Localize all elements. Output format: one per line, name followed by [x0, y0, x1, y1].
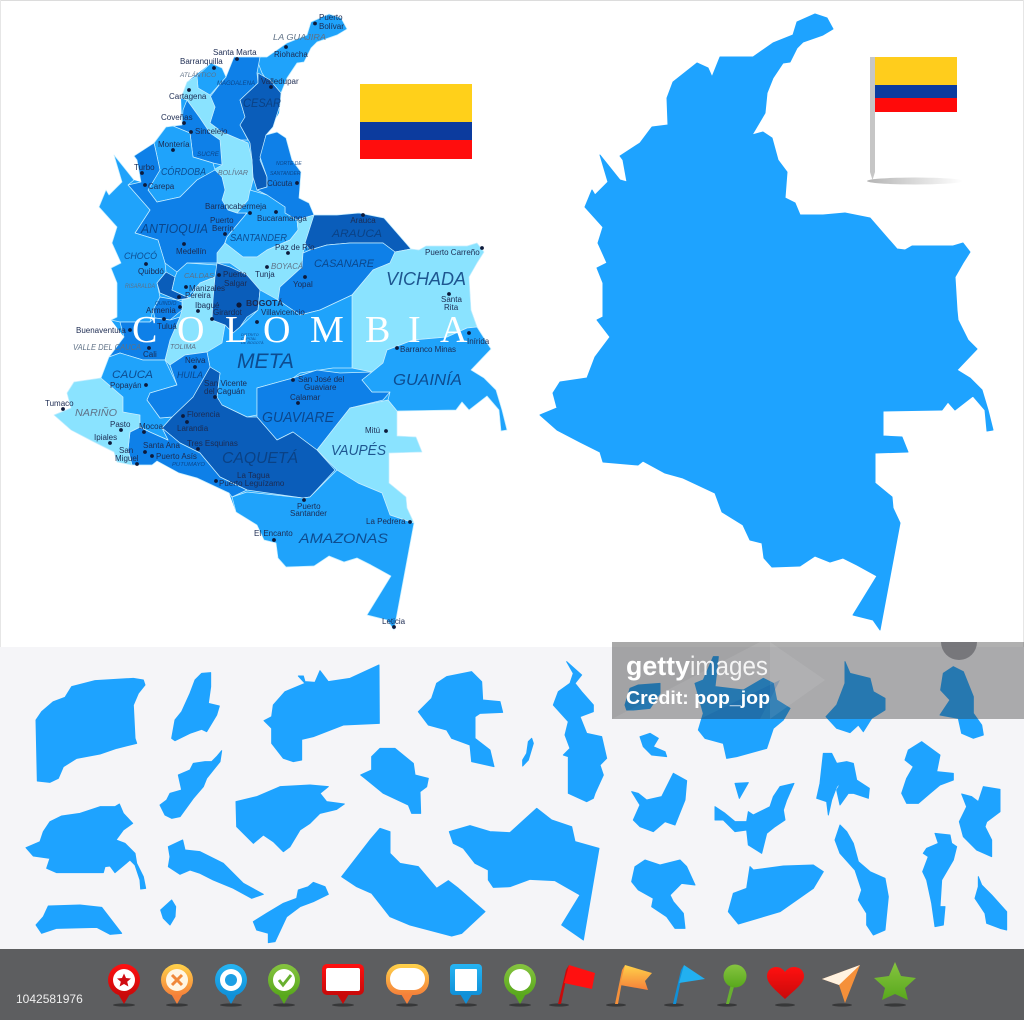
department labels: META — [237, 350, 294, 373]
city labels: del Caguán — [204, 387, 245, 396]
city labels: Manizales — [189, 284, 225, 293]
city labels: Bolívar — [319, 22, 344, 31]
city labels: Salgar — [224, 279, 247, 288]
department labels: DE BOGOTÁ — [241, 341, 264, 345]
city labels: Girardot — [213, 308, 243, 317]
watermark banner: Credit: pop_jop — [626, 688, 770, 708]
department labels: HUILA — [177, 370, 203, 380]
city labels: San Vicente — [204, 379, 248, 388]
department labels: ANTIOQUIA — [140, 221, 208, 236]
department labels: CHOCÓ — [124, 251, 157, 261]
city labels: Bucaramanga — [257, 214, 307, 223]
city labels: Valledupar — [261, 77, 299, 86]
city labels: Barranquilla — [180, 57, 223, 66]
city labels: Miguel — [115, 454, 139, 463]
icon: red speech bubble — [322, 964, 364, 1004]
icon: orange speech bubble — [386, 964, 429, 1004]
panel: plain silhouette map of Colombia — [540, 14, 993, 630]
icon: green round pin — [724, 964, 746, 1004]
city labels — [45, 13, 490, 626]
city labels: Ipiales — [94, 433, 117, 442]
city labels: Popayán — [110, 381, 142, 390]
city labels: Puerto Asís — [156, 452, 197, 461]
department labels: BOLÍVAR — [218, 168, 249, 177]
city labels: Puerto Leguízamo — [219, 479, 285, 488]
icon shadows — [113, 1003, 906, 1007]
city labels: Armenia — [146, 306, 176, 315]
shapes: middle column — [342, 662, 607, 940]
city labels: Florencia — [187, 410, 220, 419]
department labels: VAUPÉS — [331, 442, 386, 459]
shapes: left column — [26, 665, 379, 943]
city labels: Santa Ana — [143, 441, 180, 450]
city labels: Santa — [441, 295, 462, 304]
department labels: TOLIMA — [170, 342, 196, 351]
city labels: Tumaco — [45, 399, 74, 408]
city labels: Neiva — [185, 356, 206, 365]
city labels: Pasto — [110, 420, 131, 429]
city labels: Rita — [444, 303, 459, 312]
icon: blue flag — [673, 965, 705, 1004]
flag on pole — [867, 57, 963, 184]
panel: individual department shapes — [0, 647, 1024, 949]
city labels: BOGOTÁ — [246, 298, 283, 308]
department labels: DISTRITO — [241, 333, 259, 337]
icon: red flag — [558, 965, 595, 1004]
department labels: GUAVIARE — [262, 409, 335, 426]
department labels: ATLÁNTICO — [179, 70, 216, 79]
city labels: Riohacha — [274, 50, 308, 59]
icon: blue square pin — [450, 964, 482, 1004]
city labels: Inírida — [467, 337, 490, 346]
icon: navigation arrow — [822, 965, 860, 1003]
city labels: Mitú — [365, 426, 380, 435]
city labels: Sincelejo — [195, 127, 228, 136]
departments — [54, 14, 507, 630]
city markers — [61, 22, 484, 629]
city labels: Villavicencio — [261, 308, 305, 317]
city labels: Tres Esquinas — [187, 439, 238, 448]
watermark banner — [612, 642, 1024, 719]
city labels: Yopal — [293, 280, 313, 289]
department labels: NARIÑO — [75, 406, 117, 419]
city labels: Turbo — [134, 163, 155, 172]
city labels: La Pedrera — [366, 517, 406, 526]
city labels: Quibdó — [138, 267, 164, 276]
department labels: MAGDALENA — [217, 80, 255, 87]
icon: orange flag — [615, 965, 652, 1004]
city labels: Ibagué — [195, 301, 220, 310]
map title: COLOMBIA: COLOMBIA — [132, 309, 468, 351]
department labels: QUINDÍO — [155, 300, 176, 307]
department labels — [73, 32, 466, 546]
department labels: NORTE DE — [276, 161, 302, 167]
city labels: Cúcuta — [267, 179, 293, 188]
department labels: VALLE DEL CAUCA — [73, 343, 141, 352]
department labels: VICHADA — [386, 269, 466, 289]
shapes: right column — [625, 657, 1007, 935]
city labels: San — [119, 446, 133, 455]
icon: green star — [874, 962, 916, 1000]
department labels: SANTANDER — [270, 171, 301, 177]
department labels: CASANARE — [314, 258, 375, 270]
icon: green circle pin — [504, 964, 536, 1004]
city labels: Puerto — [297, 502, 321, 511]
department labels: LA GUAJIRA — [273, 32, 326, 42]
city labels: Leticia — [382, 617, 406, 626]
department labels: ARAUCA — [331, 228, 382, 240]
icon: blue ring pin — [215, 964, 247, 1004]
department labels: CALDAS — [184, 273, 214, 280]
department labels: BOYACÁ — [271, 262, 303, 271]
toolbar: icon strip — [0, 949, 1024, 1020]
icon: orange cross pin — [161, 964, 193, 1004]
city labels: Tunja — [255, 270, 275, 279]
city labels: Santander — [290, 509, 327, 518]
city labels: Paz de Río — [275, 243, 315, 252]
department labels: CAUCA — [112, 369, 153, 381]
city labels: Larandia — [177, 424, 209, 433]
department labels: GUAINÍA — [393, 370, 462, 389]
city labels: Montería — [158, 140, 190, 149]
city labels: Guaviare — [304, 383, 337, 392]
department labels: CESAR — [243, 96, 281, 110]
city labels: Puerto — [210, 216, 234, 225]
flag of Colombia — [360, 84, 472, 159]
city labels: Tuluá — [157, 322, 177, 331]
department labels: SANTANDER — [230, 233, 287, 244]
city labels: Pereira — [185, 291, 211, 300]
panel: detailed map of Colombia with departments — [45, 13, 507, 630]
city labels: Calamar — [290, 393, 321, 402]
image id: 1042581976 — [16, 992, 83, 1006]
city labels: Coveñas — [161, 113, 193, 122]
map base outline — [54, 14, 507, 630]
city labels: La Tagua — [237, 471, 270, 480]
department labels: CAQUETÁ — [222, 448, 298, 467]
watermark banner: images — [690, 651, 768, 681]
department labels: AMAZONAS — [298, 530, 389, 546]
city labels: Puerto — [319, 13, 343, 22]
department labels: PUTUMAYO — [172, 462, 206, 468]
city labels: Mocoa — [139, 422, 164, 431]
city labels: Medellín — [176, 247, 206, 256]
city labels: Carepa — [148, 182, 175, 191]
city labels: Puerto Carreño — [425, 248, 480, 257]
city labels: Puerto — [223, 270, 247, 279]
city labels: Buenaventura — [76, 326, 126, 335]
city labels: Cali — [143, 350, 157, 359]
city labels: El Encanto — [254, 529, 293, 538]
city labels: Cartagena — [169, 92, 207, 101]
city labels: Barranco Minas — [400, 345, 456, 354]
watermark banner: getty — [626, 651, 690, 681]
city labels: San José del — [298, 375, 344, 384]
department labels: RISARALDA — [125, 284, 155, 290]
city labels: Berrín — [212, 224, 234, 233]
icon: red heart — [767, 967, 804, 999]
icon: green check pin — [268, 964, 300, 1004]
department labels: CAPITAL — [241, 337, 257, 341]
department labels: SUCRE — [197, 151, 220, 158]
city labels: Barrancabermeja — [205, 202, 267, 211]
icon: red star pin — [108, 964, 140, 1004]
city labels: Arauca — [350, 216, 376, 225]
department labels: CÓRDOBA — [161, 165, 206, 178]
city labels: Santa Marta — [213, 48, 257, 57]
